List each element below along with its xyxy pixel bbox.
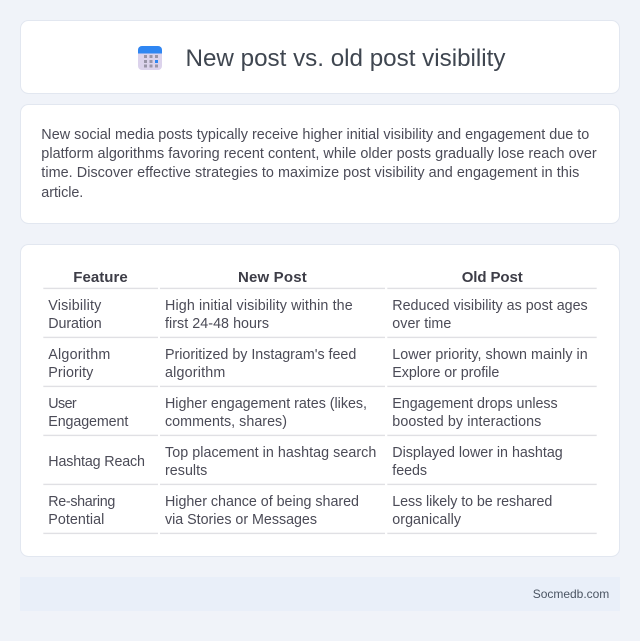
text block: introduction [41, 127, 597, 201]
text block: introduction: article. [41, 185, 83, 201]
table row: visibility duration: over time [392, 316, 451, 332]
footer [20, 577, 620, 611]
table row: re-sharing potential: Higher chance of being shared [165, 494, 359, 510]
panel: title card [20, 20, 620, 94]
text block: introduction: platform algorithms favoring recent content, while older posts gradually lose reach over [41, 146, 597, 162]
table row: re-sharing potential: Re-sharing [48, 494, 115, 510]
table row: user engagement: Engagement [48, 414, 128, 430]
table row: algorithm priority [48, 347, 588, 381]
panel: comparison table [20, 244, 620, 556]
icon: calendar [138, 46, 162, 70]
table row: re-sharing potential: Potential [48, 512, 104, 528]
table row: user engagement: boosted by interactions [392, 414, 541, 430]
title: New post vs. old post visibility [186, 45, 506, 72]
text block: introduction: time. Discover effective strategies to maximize post visibility and engagement in this [41, 165, 579, 181]
table header [73, 269, 523, 286]
table row: user engagement [48, 396, 558, 430]
table row: user engagement: comments, shares) [165, 414, 287, 430]
table row: user engagement: Engagement drops unless [392, 396, 558, 412]
table row: re-sharing potential: Less likely to be reshared [392, 494, 552, 510]
table row: user engagement: Higher engagement rates (likes, [165, 396, 367, 412]
table header: New Post [238, 269, 307, 286]
table row: hashtag reach: Top placement in hashtag search [165, 445, 376, 461]
table row: algorithm priority: Lower priority, shown mainly in [392, 347, 588, 363]
table row: algorithm priority: Priority [48, 365, 94, 381]
table row: visibility duration: Duration [48, 316, 102, 332]
table row: hashtag reach: Hashtag Reach [48, 454, 145, 470]
table row: visibility duration: Reduced visibility as post ages [392, 298, 588, 314]
table row: visibility duration: High initial visibility within the [165, 298, 353, 314]
table row: re-sharing potential: via Stories or Messages [165, 512, 317, 528]
table row: hashtag reach: results [165, 463, 207, 479]
table row: re-sharing potential [48, 494, 552, 528]
table row: hashtag reach: feeds [392, 463, 427, 479]
table row: hashtag reach: Displayed lower in hashtag [392, 445, 563, 461]
table row: hashtag reach [48, 445, 563, 479]
table header: Feature [73, 269, 128, 286]
table row: algorithm priority: Explore or profile [392, 365, 499, 381]
footer text: Socmedb.com [533, 587, 609, 601]
table row: algorithm priority: Algorithm [48, 347, 110, 363]
panel: introduction [20, 104, 620, 224]
table row: algorithm priority: Prioritized by Instagram's feed [165, 347, 356, 363]
table row: re-sharing potential: organically [392, 512, 462, 528]
table row: visibility duration [48, 298, 588, 332]
text block: introduction: New social media posts typically receive higher initial visibility and engagement due to [41, 127, 589, 143]
table row: visibility duration: Visibility [48, 298, 102, 314]
table row: algorithm priority: algorithm [165, 365, 225, 381]
table row: visibility duration: first 24-48 hours [165, 316, 269, 332]
table row: user engagement: User [48, 396, 77, 412]
table header: Old Post [462, 269, 523, 286]
